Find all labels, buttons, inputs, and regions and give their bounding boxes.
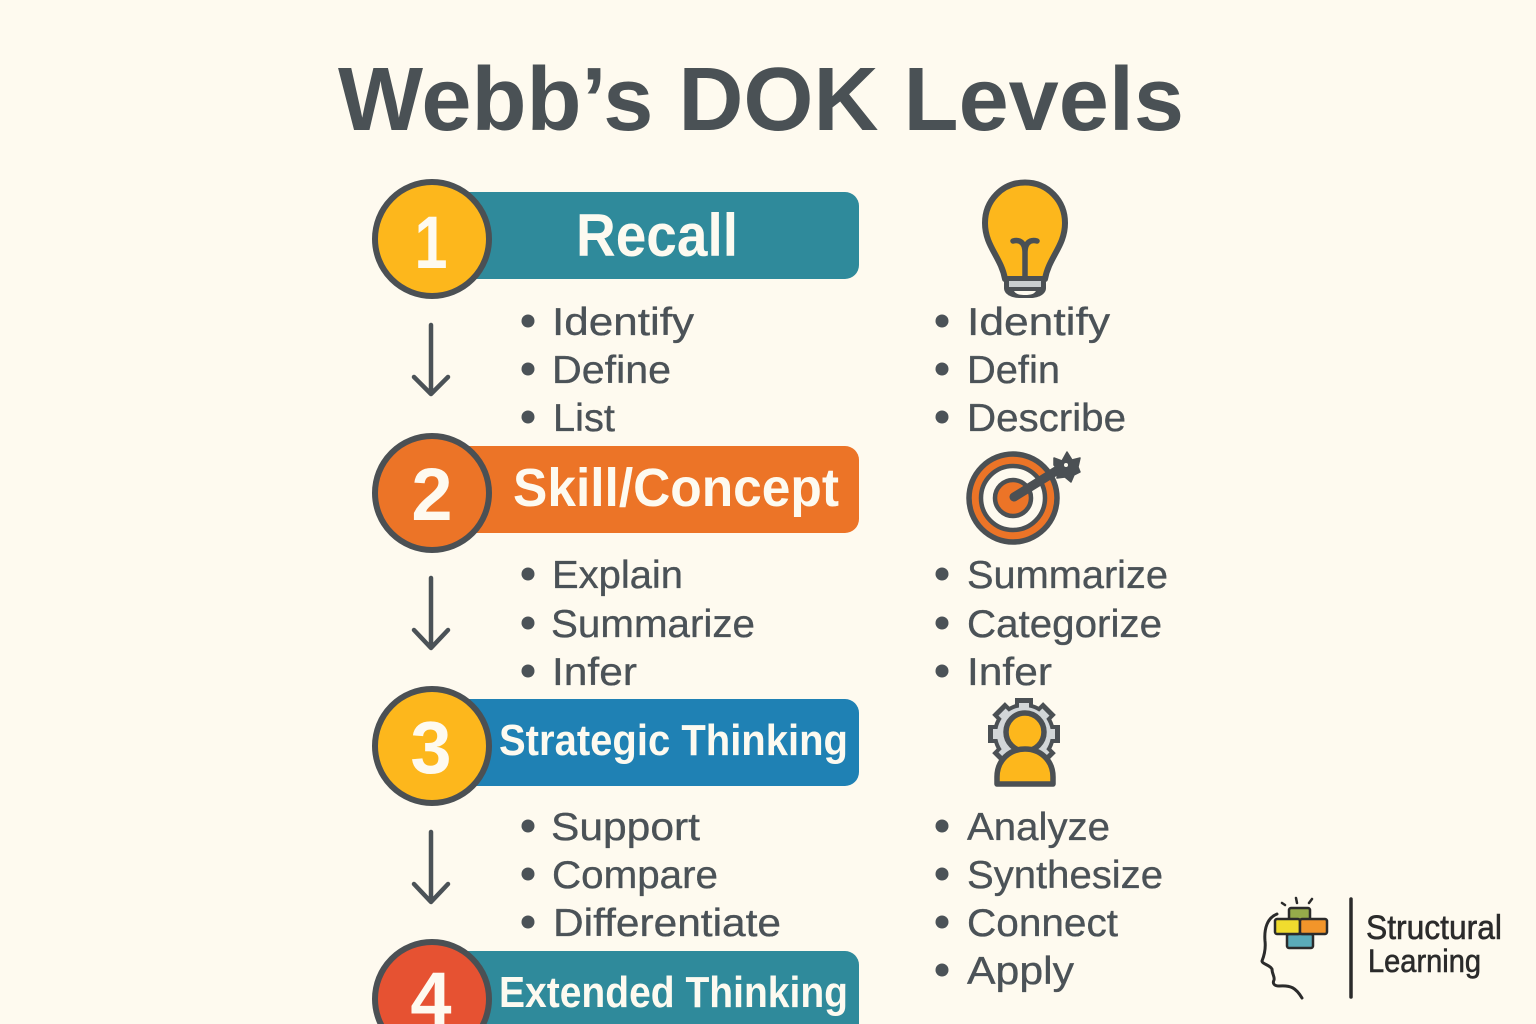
right list for level 1: Describe — [967, 397, 1126, 440]
level 1 number: 1 — [414, 201, 448, 284]
right list for level 1: Identify — [967, 301, 1111, 344]
logo wordmark line 2: Learning — [1368, 943, 1481, 979]
logo: Structural Learning — [1262, 898, 1502, 998]
icon: person with gear — [988, 698, 1060, 784]
title: Webb’s DOK Levels — [338, 50, 1184, 150]
right list for level 1 — [936, 301, 1126, 440]
arrow 2 to 3 — [414, 578, 448, 648]
level 1 verbs list: List — [553, 397, 615, 440]
right list for level 1: Defin — [967, 349, 1060, 392]
right list for level 2: Summarize — [967, 554, 1168, 597]
level 2 verbs list: Infer — [552, 651, 637, 694]
level 2 verbs list: Explain — [552, 554, 683, 597]
icon: light bulb — [985, 182, 1065, 298]
level 2 bar — [440, 446, 859, 533]
level 2 header — [375, 436, 859, 550]
level 3 verbs list: Support — [551, 806, 700, 849]
level 1 badge — [375, 182, 489, 296]
right list for level 2: Categorize — [967, 603, 1162, 646]
level 3 verbs list — [522, 806, 781, 945]
level 3 verbs list: Differentiate — [553, 902, 781, 945]
level 1 bar — [440, 192, 859, 279]
arrow 3 to 4 — [414, 832, 448, 902]
right list for level 2 — [936, 554, 1168, 694]
right list for level 2: Infer — [967, 651, 1052, 694]
level 1 verbs list: Identify — [552, 301, 695, 344]
logo head outline — [1262, 914, 1302, 998]
level 3 number: 3 — [410, 706, 452, 789]
right list for level 3: Apply — [967, 950, 1075, 993]
arrow 1 to 2 — [414, 325, 448, 394]
icon: target with dart — [969, 452, 1080, 542]
level 3 header — [375, 689, 859, 803]
logo spark lines — [1282, 898, 1312, 905]
level 2 verbs list: Summarize — [551, 603, 755, 646]
level 4 bar — [440, 951, 859, 1024]
level 2 number: 2 — [411, 453, 453, 536]
level 4 badge — [375, 942, 489, 1024]
level 1 verbs list: Define — [552, 349, 671, 392]
right list for level 3: Synthesize — [967, 854, 1163, 897]
level 1 header — [375, 182, 859, 296]
level 2 name: Skill/Concept — [513, 458, 839, 518]
right list for level 3: Connect — [967, 902, 1118, 945]
logo coloured blocks — [1275, 908, 1327, 948]
right list for level 3 — [936, 806, 1163, 993]
level 4 header — [375, 942, 859, 1024]
level 3 name: Strategic Thinking — [499, 716, 848, 765]
level 3 verbs list: Compare — [552, 854, 718, 897]
level 2 badge — [375, 436, 489, 550]
level 3 badge — [375, 689, 489, 803]
level 3 bar — [440, 699, 859, 786]
logo divider — [1349, 899, 1353, 997]
logo wordmark line 1: Structural — [1366, 909, 1502, 947]
level 1 name: Recall — [576, 202, 738, 269]
level 2 verbs list — [522, 554, 755, 694]
right list for level 3: Analyze — [967, 806, 1110, 849]
level 1 verbs list — [522, 301, 695, 440]
level 4 name: Extended Thinking — [499, 968, 848, 1017]
